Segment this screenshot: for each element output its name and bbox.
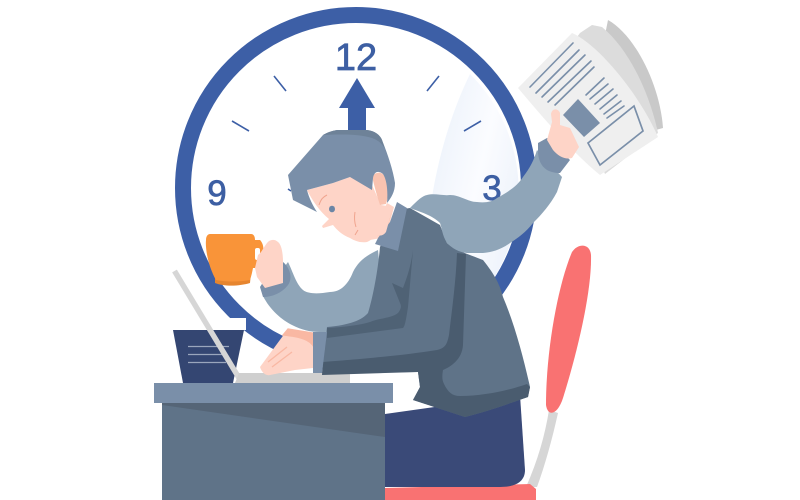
clock tick marks xyxy=(232,76,481,191)
jacket fold shadow xyxy=(327,250,413,338)
right hand holding paper xyxy=(410,138,570,253)
chair support xyxy=(526,410,558,487)
desk top xyxy=(154,383,393,403)
trousers xyxy=(385,395,525,487)
right cuff xyxy=(538,138,570,173)
clock ring xyxy=(183,15,529,361)
hair back shade xyxy=(323,130,387,155)
hair xyxy=(288,130,395,212)
chair back xyxy=(546,246,591,413)
mug handle xyxy=(252,240,263,268)
face xyxy=(307,177,393,242)
jacket torso xyxy=(322,208,530,417)
neck shade xyxy=(377,207,393,237)
front sheet xyxy=(518,33,658,175)
desk shadow xyxy=(162,403,385,437)
neck xyxy=(370,203,394,240)
person xyxy=(206,20,663,417)
white gap over clock ring xyxy=(173,318,246,330)
eyebrow and mouth lines xyxy=(319,195,358,235)
left cuff xyxy=(260,262,290,297)
mug body xyxy=(206,234,255,282)
navy folder xyxy=(173,330,244,383)
desk body xyxy=(162,403,385,500)
jacket cuff xyxy=(313,332,327,373)
paper hand xyxy=(547,109,579,159)
desk xyxy=(154,383,393,500)
clock face highlight xyxy=(432,74,519,296)
photo block xyxy=(563,99,600,137)
clock hand arrow xyxy=(339,78,375,135)
typing hand xyxy=(260,329,313,375)
middle sheet xyxy=(560,25,658,174)
left sweater arm xyxy=(263,250,385,332)
ear xyxy=(372,173,388,205)
clock numeral 3: 3 xyxy=(482,169,502,208)
clock numeral 12: 12 xyxy=(335,37,377,79)
chair seat xyxy=(385,484,536,500)
typing hand shading xyxy=(268,329,314,367)
mug bottom xyxy=(215,272,251,286)
folder lines xyxy=(188,346,229,362)
laptop base xyxy=(235,373,350,383)
newspaper xyxy=(518,20,663,175)
laptop and documents xyxy=(173,271,350,383)
clock numeral 9: 9 xyxy=(207,174,227,213)
back sheet xyxy=(600,20,663,131)
mug hand xyxy=(255,240,283,288)
outlined box xyxy=(588,106,643,165)
laptop screen xyxy=(174,271,239,378)
clock xyxy=(183,15,529,361)
jacket shadow xyxy=(322,253,530,417)
chair xyxy=(385,246,591,500)
right sweater arm xyxy=(410,150,562,253)
eye xyxy=(329,206,335,212)
text lines xyxy=(530,43,624,118)
mug handle hole xyxy=(255,248,260,260)
jacket collar xyxy=(375,202,407,251)
mug xyxy=(206,234,263,286)
